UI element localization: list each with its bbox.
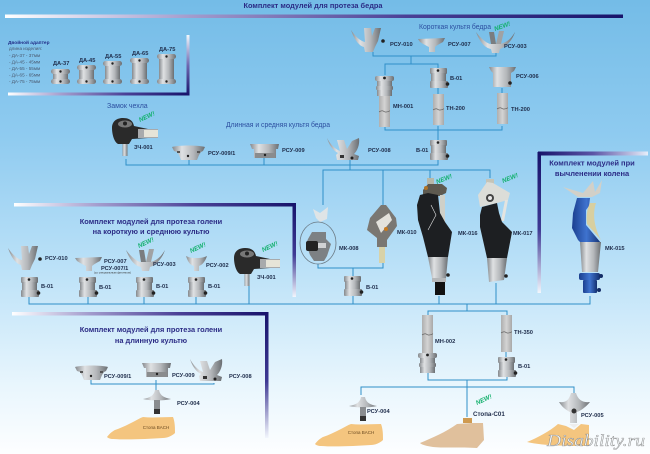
module: РСУ-009	[142, 363, 195, 379]
module: ЗЧ-001: NEW!	[261, 240, 279, 254]
heading: shin set short: Комплект модулей для протеза голени	[80, 217, 223, 226]
module: МК-015	[563, 180, 625, 293]
module: РСУ-007 top: РСУ-007	[448, 42, 471, 48]
module: РСУ-007: РСУ-007/1	[101, 266, 128, 272]
module: В-01 row: В-01	[208, 284, 220, 290]
icon: ЗЧ-001: NEW!	[138, 110, 156, 124]
module: В-01 row: В-01	[41, 284, 53, 290]
module: РСУ-010 top	[351, 28, 413, 52]
module: РСУ-008 upper	[327, 138, 391, 160]
module: РСУ-008	[190, 359, 252, 381]
module: РСУ-003	[126, 236, 176, 271]
module: МК-015: МК-015	[605, 246, 625, 252]
panel: shin set short stump: на короткую и среднюю культю	[93, 227, 210, 236]
module: РСУ-003 top	[476, 21, 527, 53]
module: РСУ-006 and ТН-200	[489, 67, 539, 124]
module: В-01 and ТН-200	[430, 68, 465, 125]
icon: ДА-37: ДА-37	[53, 61, 69, 67]
module: РСУ-005 with foot: РСУ-005	[581, 413, 604, 419]
module: ТН-350	[501, 315, 533, 352]
module: РСУ-009: РСУ-009	[172, 373, 195, 379]
module: МН-001	[375, 76, 413, 127]
module: РСУ-009 upper: РСУ-009	[282, 148, 305, 154]
module: РСУ-003: РСУ-003	[153, 262, 176, 268]
icon: ЗЧ-001: ЗЧ-001	[134, 145, 153, 151]
heading: knee set: Комплект модулей при	[549, 158, 635, 168]
module: В-01 bottom	[498, 357, 530, 377]
module: ТН-350: ТН-350	[514, 330, 533, 336]
panel: double adapters	[8, 35, 190, 96]
module: РСУ-010: РСУ-010	[45, 256, 68, 262]
panel: shin set long stump	[12, 312, 268, 439]
module: В-01 centre	[344, 276, 378, 296]
module: МК-016: МК-016	[458, 231, 478, 237]
module: РСУ-004	[143, 390, 200, 414]
panel: shin set short stump	[8, 203, 296, 297]
text block: adapter lengths: - ДА-55 - 55мм	[9, 66, 40, 71]
module: В-01 row	[21, 277, 220, 297]
module: РСУ-009/1	[75, 366, 131, 380]
foot: Стопа BACH: Стопа BACH	[143, 425, 169, 430]
module: В-01 under short stump	[416, 140, 449, 160]
module: МК-017: МК-017	[513, 231, 533, 237]
module: МН-002	[418, 315, 455, 373]
module: РСУ-002	[186, 241, 229, 271]
foot: Стопа-С01: Стопа-С01	[473, 411, 505, 418]
connector lines	[29, 52, 590, 417]
icon: ЗЧ-001	[112, 110, 158, 156]
module: РСУ-010 top: РСУ-010	[390, 42, 413, 48]
module: РСУ-007: (со специальным фитингом)	[94, 270, 131, 274]
icon: ДА-37	[51, 61, 70, 84]
text block: adapter lengths	[8, 39, 50, 84]
module: МК-008: МК-008	[339, 246, 359, 252]
panel: disarticulation knee set: вычленении колена	[555, 169, 630, 178]
module: РСУ-004 with foot	[315, 397, 390, 446]
module: ЗЧ-001	[234, 240, 280, 286]
text block: adapter lengths: - ДА-45 - 45мм	[9, 60, 40, 64]
module: В-01 row: В-01	[156, 284, 168, 290]
module: РСУ-004: РСУ-004	[177, 401, 200, 407]
header bar	[5, 14, 623, 18]
module: РСУ-009/1 upper	[172, 146, 235, 160]
module: В-01 row: В-01	[99, 285, 111, 291]
module: РСУ-005 with foot	[527, 393, 604, 446]
foot: Стопа BACH	[107, 417, 175, 439]
module: МН-001: МН-001	[393, 104, 413, 110]
foot: Стопа-С01: NEW!	[475, 393, 493, 407]
module: РСУ-008 upper: РСУ-008	[368, 148, 391, 154]
icon: ДА-45: ДА-45	[79, 58, 95, 64]
module: РСУ-006 and ТН-200: ТН-200	[511, 107, 530, 113]
module: МК-017	[478, 172, 533, 282]
module: В-01 and ТН-200: В-01	[450, 76, 462, 82]
module: РСУ-004 with foot: Стопа BACH	[348, 430, 374, 435]
module: МК-010	[367, 205, 417, 263]
panel: shin set long stump: на длинную культю	[115, 336, 188, 345]
text: длинная и средняя культя: Длинная и средняя культя бедра	[226, 121, 330, 129]
text block: adapter lengths: - ДА-37 - 37мм	[9, 53, 40, 58]
text: короткая культя: Короткая культя бедра	[419, 23, 491, 31]
foot: Стопа-С01	[420, 393, 505, 448]
icon: ДА-55	[103, 54, 122, 84]
module: РСУ-007 top	[418, 38, 471, 52]
module: ЗЧ-001: ЗЧ-001	[257, 275, 276, 281]
module: РСУ-008: РСУ-008	[229, 374, 252, 380]
icon: ДА-75	[157, 47, 176, 84]
module: МК-010: МК-010	[397, 230, 417, 236]
panel: disarticulation knee set	[538, 152, 648, 293]
module: РСУ-009 upper	[250, 144, 305, 158]
heading: shin set long: Комплект модулей для протеза голени	[80, 325, 223, 334]
module: В-01 and ТН-200: ТН-200	[446, 106, 465, 112]
watermark: Disability.ru	[546, 431, 645, 450]
module: РСУ-003 top: РСУ-003	[504, 44, 527, 50]
module: В-01 bottom: В-01	[518, 364, 530, 370]
module: РСУ-002: NEW!	[189, 241, 207, 255]
icon: ДА-65: ДА-65	[132, 51, 148, 57]
text block: adapter lengths: Двойной адаптер	[8, 39, 50, 46]
icon: ДА-45	[77, 58, 96, 84]
module: РСУ-004 with foot: РСУ-004	[367, 409, 390, 415]
module: МК-017: NEW!	[501, 172, 519, 185]
text: замок чехла: Замок чехла	[107, 103, 148, 110]
module: РСУ-003 top: NEW!	[493, 21, 511, 33]
text block: adapter lengths: длина изделия:	[9, 46, 42, 51]
module: РСУ-009/1 upper: РСУ-009/1	[208, 151, 235, 157]
module: РСУ-007: РСУ-007	[104, 259, 127, 265]
module: МН-002: МН-002	[435, 339, 455, 345]
module: РСУ-010	[8, 246, 68, 270]
module: РСУ-003: NEW!	[137, 236, 155, 250]
module: РСУ-006 and ТН-200: РСУ-006	[516, 74, 539, 80]
text block: adapter lengths: - ДА-75 - 75мм	[9, 79, 40, 84]
module: РСУ-007	[75, 257, 131, 274]
module: В-01 centre: В-01	[366, 285, 378, 291]
module: РСУ-009/1: РСУ-009/1	[104, 374, 131, 380]
text block: adapter lengths: - ДА-65 - 65мм	[9, 72, 40, 78]
module: В-01 under short stump: В-01	[416, 148, 428, 154]
module: МК-008	[300, 207, 359, 264]
module: РСУ-002: РСУ-002	[206, 263, 229, 269]
icon: ДА-75: ДА-75	[159, 47, 175, 53]
title: main heading: Комплект модулей для протеза бедра	[244, 1, 383, 10]
module: МК-016: NEW!	[435, 173, 453, 186]
module: МК-016	[417, 173, 478, 295]
icon: ДА-65	[130, 51, 149, 84]
icon: ДА-55: ДА-55	[105, 54, 121, 60]
